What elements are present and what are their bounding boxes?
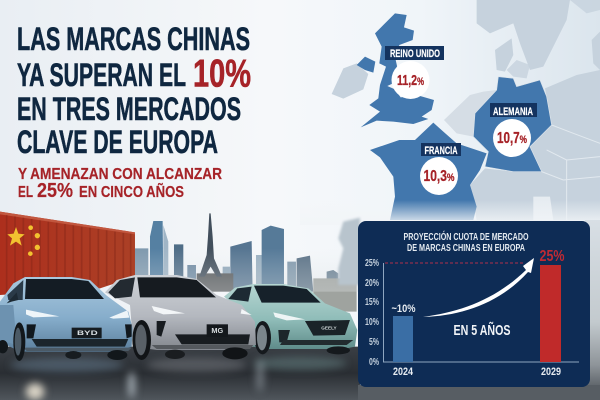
bar 2024: [392, 303, 416, 378]
label: Reino Unido: 11,2%: [397, 72, 424, 89]
y axis labels: 20%: [365, 278, 379, 289]
highlighted France: [370, 123, 487, 220]
photo scene: skyline, container, cars and road: [0, 212, 360, 400]
grey neighbouring countries: [332, 0, 600, 220]
subtitle: [18, 166, 222, 202]
label: Alemania: ALEMANIA: [493, 106, 533, 118]
chart title: PROYECCIÓN CUOTA DE MERCADO: [404, 230, 528, 243]
title: EN TRES MERCADOS: [17, 91, 241, 127]
chart title: DE MARCAS CHINAS EN EUROPA: [407, 242, 525, 254]
road reflections: [10, 357, 347, 400]
blue BYD car: [0, 277, 133, 361]
BYD badge: BYD: [77, 330, 98, 337]
subtitle: Y AMENAZAN CON ALCANZAR: [18, 166, 222, 183]
caption: EN 5 AÑOS: [454, 321, 510, 339]
highlighted United Kingdom: [357, 13, 434, 127]
ground right of cars: [358, 385, 600, 400]
label: Reino Unido: [385, 46, 444, 99]
subtitle: 25%: [37, 180, 73, 202]
skyline haze: [133, 248, 360, 292]
wet road: [0, 347, 360, 400]
cloud behind chart: [338, 218, 360, 285]
right side mist beside chart: [585, 220, 600, 390]
subtitle: EL: [18, 184, 33, 201]
y axis labels: 5%: [369, 337, 379, 348]
y axis labels: [365, 258, 379, 368]
title: 10%: [193, 52, 251, 96]
city skyline: [135, 213, 357, 312]
shipping container with Chinese flag: [0, 212, 135, 295]
Geely badge: GEELY: [321, 325, 338, 330]
flag stars: [7, 225, 40, 256]
MG badge: MG: [211, 326, 224, 335]
subtitle: EN CINCO AÑOS: [79, 181, 184, 201]
25 percent dashed target line: [385, 262, 525, 264]
highlighted Germany: [473, 77, 552, 172]
bar 2029: 2029: [541, 366, 561, 378]
wheels: [13, 322, 25, 361]
label: Francia: 10,3%: [424, 168, 455, 185]
bar 2029: [540, 248, 564, 378]
label: Alemania: [490, 103, 537, 157]
y axis labels: 25%: [365, 258, 379, 269]
label: Francia: [420, 143, 461, 195]
title: LAS MARCAS CHINAS: [17, 21, 250, 57]
label: Reino Unido: REINO UNIDO: [390, 48, 440, 60]
green Geely car: [224, 284, 357, 354]
y axis labels: 15%: [365, 297, 379, 308]
map of western Europe: [332, 0, 600, 220]
y axis labels: 10%: [365, 317, 379, 328]
Eiffel tower: [199, 213, 222, 277]
bar 2024: 2024: [393, 366, 414, 378]
wheels: [132, 320, 151, 360]
chart title: [404, 230, 528, 254]
axes: [384, 263, 579, 362]
y axis labels: 0%: [369, 357, 379, 368]
MG badge: [207, 324, 228, 337]
chart panel: [358, 221, 590, 387]
title: YA SUPERAN EL: [17, 57, 186, 93]
title: [17, 21, 251, 160]
growth arrow: [423, 258, 534, 317]
bar 2024: ~10%: [392, 303, 416, 315]
lines between countries: [542, 125, 600, 220]
bar 2029: 25%: [540, 248, 564, 265]
wheels: [254, 321, 271, 354]
label: Alemania: 10,7%: [497, 130, 527, 147]
map bottom fade into sky: [300, 200, 600, 225]
label: Francia: FRANCIA: [424, 145, 458, 157]
title: CLAVE DE EUROPA: [17, 124, 218, 160]
silver MG car: [105, 275, 256, 360]
